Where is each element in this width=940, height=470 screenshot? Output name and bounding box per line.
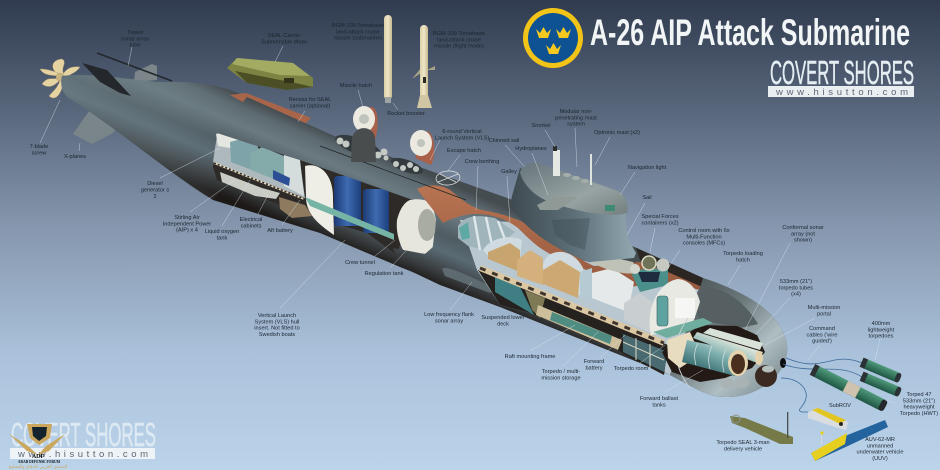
label: vertical launch hull insert: insert. Not fitted to <box>254 326 300 332</box>
label: snorkel <box>532 123 555 147</box>
label: vertical launch hull insert <box>254 240 345 338</box>
torpedo tubes <box>667 328 763 376</box>
dark upper hull near nose <box>636 248 712 290</box>
label: forward ballast tanks: tanks <box>652 402 666 408</box>
frame ring <box>676 318 690 388</box>
towed sonar array tube and fairing <box>97 53 172 82</box>
main cutaway background <box>460 220 703 375</box>
label: modular mast system <box>555 109 597 167</box>
vertical launch system blue tubes <box>334 176 389 233</box>
watermark: Arab Defense Forum shield: ARAB DEFENSE FORUM <box>18 460 61 464</box>
label: torpedo tubes: 533mm (21") <box>780 279 812 285</box>
teal deck <box>305 197 394 240</box>
label: torpedo room <box>614 345 665 372</box>
label: Stirling AIP <box>163 180 235 234</box>
label: rocket booster <box>387 103 425 117</box>
label: Tomahawk submarine: missile (submarine) <box>334 36 382 42</box>
label: electrical cabinets <box>240 195 268 229</box>
label: SEAL carrier <box>261 33 308 62</box>
pressure hull copper band <box>417 185 705 292</box>
label: regulation tank: Regulation tank <box>365 271 404 277</box>
special forces containers <box>590 252 670 274</box>
label: torpedo storage <box>541 332 598 382</box>
label: lightweight torpedoes <box>868 321 895 360</box>
watermark: Covert Shores: www.hisutton.com <box>17 449 148 460</box>
heavyweight torpedo <box>810 364 888 412</box>
label: screw: screw <box>32 150 47 156</box>
aft cutaway: machinery <box>213 132 413 255</box>
label: snorkel: Snorkel <box>532 123 550 129</box>
lower mid hull panel <box>393 220 500 307</box>
icon: electrical cabinets <box>273 170 290 186</box>
label: forward battery: Forward <box>584 359 604 365</box>
label: towed sonar array tube <box>121 30 149 66</box>
label: navigation light: Navigation light <box>628 165 667 171</box>
label: rocket booster: Rocket booster <box>387 111 425 117</box>
nose cap <box>670 278 787 397</box>
icon: crown right <box>556 27 571 38</box>
forward ballast tank and lower nose <box>720 358 786 388</box>
lightweight torpedo 2 <box>860 372 902 397</box>
aft bulkhead <box>305 165 334 235</box>
label: forward battery <box>584 335 625 371</box>
mast ovals <box>563 173 589 183</box>
label: conformal sonar array: shown) <box>794 238 812 244</box>
sail <box>510 146 636 262</box>
icon: diesel generator 2 <box>250 147 284 183</box>
label: Tomahawk flight mode: BGM-109 Tomahawk <box>433 31 485 37</box>
Tomahawk missile submarine mode <box>384 15 392 103</box>
label: forward ballast tanks: Forward ballast <box>640 396 679 402</box>
label: recess for SEAL carrier: Recess for SEAL <box>289 97 331 103</box>
arched bulkhead behind stores <box>483 237 522 260</box>
label: Tomahawk flight mode: missile (flight mode) <box>434 44 484 50</box>
label: command cables: cables ('wire <box>807 332 837 338</box>
torpedo room opening <box>662 325 765 382</box>
label: vertical launch hull insert: Vertical Launch <box>258 313 296 319</box>
SubROV <box>808 408 848 430</box>
label: Tomahawk submarine: land-attack cruise <box>336 29 380 35</box>
label: hydroplanes <box>515 146 548 195</box>
icon: diesel generator 1 <box>230 138 258 172</box>
label: missile hatch <box>340 83 372 107</box>
label: heavyweight torpedo <box>885 392 938 417</box>
label: vertical launch hull insert: Swedish boats <box>259 332 295 338</box>
label: liquid oxygen tank: tank <box>217 235 227 241</box>
label: SubROV: SubROV <box>829 403 851 409</box>
label: sail <box>627 195 652 235</box>
label: multi-mission portal: portal <box>817 311 831 317</box>
label: torpedo loading hatch <box>723 251 763 285</box>
label: heavyweight torpedo: Torped 47 <box>907 392 931 398</box>
label: modular mast system: penetrating mast <box>555 115 597 121</box>
label: heavyweight torpedo: 533mm (21") <box>903 398 935 404</box>
label: SEAL carrier: Submersible dhow <box>261 39 308 45</box>
watermark: Arab Defense Forum shield: المنتدى العربي للدفاع والتسليح <box>9 465 67 470</box>
X-plane upper fin <box>82 63 131 96</box>
label: torpedo loading hatch: hatch <box>736 257 750 263</box>
label: modular mast system: Modular non- <box>560 109 593 115</box>
label: screw: 7-blade <box>30 144 48 150</box>
recess for SEAL carrier <box>230 93 311 124</box>
hull insignia <box>435 170 461 186</box>
label: Stirling AIP: (AIP) x 4 <box>176 228 198 234</box>
label: crew berthing <box>465 159 499 210</box>
label: crew tunnel: Crew tunnel <box>345 260 375 266</box>
X-plane lower fin <box>73 107 118 144</box>
label: chinned sail <box>489 138 525 167</box>
label: crew berthing: Crew berthing <box>465 159 499 165</box>
label: suspended lower deck: Suspended lower <box>481 315 525 321</box>
watermark: Arab Defense Forum shield: ADF <box>32 454 44 460</box>
label: conformal sonar array: Conformal sonar <box>782 225 824 231</box>
aft battery box <box>279 197 312 218</box>
label: Tomahawk flight mode <box>433 31 485 50</box>
arched bulkhead behind box <box>542 252 583 296</box>
label: heavyweight torpedo: heavyweight <box>903 405 935 411</box>
label: raft mounting frame <box>505 325 575 360</box>
label: control room: Control room with 6x <box>678 228 730 234</box>
suspended lower deck frame <box>478 270 668 375</box>
label: torpedo storage: mission storage <box>541 376 581 382</box>
label: diesel generators: 2 <box>153 194 157 200</box>
label: crew tunnel <box>345 240 395 266</box>
command cables <box>781 358 862 412</box>
nose cap upper shell <box>695 286 758 328</box>
gray equipment box <box>624 293 652 333</box>
partition panels <box>580 268 592 300</box>
label: flank sonar: sonar array <box>435 318 463 324</box>
label: X planes <box>64 143 86 160</box>
label: torpedo room: Torpedo room <box>614 366 649 372</box>
teal deck of torpedo room <box>653 318 713 338</box>
crew tunnel bulkhead <box>397 199 436 254</box>
lightweight torpedo 1 <box>860 358 902 383</box>
label: hydroplanes: Hydroplanes <box>515 146 547 152</box>
icon: crown bottom <box>546 43 561 54</box>
label: multi-mission portal <box>765 305 840 345</box>
hull seam line <box>320 146 466 200</box>
label: escape hatch <box>447 148 481 172</box>
label: electrical cabinets: Electrical <box>240 217 262 223</box>
label: screw <box>30 100 60 156</box>
label: conformal sonar array <box>745 225 824 330</box>
crew accommodation drum <box>458 216 515 252</box>
label: AUV: underwater vehicle <box>857 450 903 456</box>
label: control room: Multi-Function <box>686 234 722 240</box>
label: suspended lower deck: deck <box>497 321 509 327</box>
label: recess for SEAL carrier: carrier (optional) <box>290 103 330 109</box>
label: command cables: Command <box>809 326 835 332</box>
forward bulkhead arch with door <box>650 279 700 335</box>
Tomahawk missile flight mode <box>412 25 435 108</box>
label: forward ballast tanks <box>640 370 703 408</box>
label: lightweight torpedoes: torpedoes <box>869 334 894 340</box>
hull strip above aft cutaway <box>217 97 470 200</box>
seven-blade propeller <box>40 59 80 98</box>
label: control room: consoles (MFCs) <box>683 241 725 247</box>
tan stores boxes <box>488 243 580 298</box>
watermark: Arab Defense Forum shield <box>9 424 67 470</box>
label: special forces container: Special Forces <box>642 214 679 220</box>
walkway deck <box>214 163 304 199</box>
label: flank sonar: Low frequency flank <box>424 312 474 318</box>
label: aft battery: Aft battery <box>267 228 293 234</box>
label: galley <box>501 169 517 222</box>
label: suspended lower deck <box>481 315 525 327</box>
label: electrical cabinets: cabinets <box>241 223 262 229</box>
submarine hull <box>61 75 787 397</box>
label: special forces container <box>642 214 679 252</box>
crew tunnel <box>418 209 436 241</box>
label: SEAL delivery vehicle: Torpedo SEAL 3-man <box>716 440 770 446</box>
label: Tomahawk submarine <box>332 23 384 42</box>
watermark: Covert Shores <box>10 416 156 460</box>
label: lightweight torpedoes: lightweight <box>868 327 895 333</box>
sail head <box>520 163 628 215</box>
label: recess for SEAL carrier <box>289 97 331 122</box>
label: torpedo tubes: (x4) <box>791 292 801 298</box>
label: Tomahawk submarine: BGM-109 Tomahawk <box>332 23 384 29</box>
label: modular mast system: system <box>567 122 585 128</box>
label: towed sonar array tube: Towed <box>127 30 143 36</box>
label: torpedo storage: Torpedo / multi- <box>542 369 580 375</box>
missile hatches <box>333 106 434 177</box>
label: navigation light <box>620 165 667 195</box>
label: torpedo tubes <box>755 279 813 335</box>
label: optronic mast: Optronic mast (x2) <box>594 130 640 136</box>
label: towed sonar array tube: tube <box>130 43 140 49</box>
label: aft battery <box>267 200 300 234</box>
control room consoles <box>630 268 668 292</box>
label: vertical launch hull insert: System (VLS) hull <box>255 319 299 325</box>
label: six-round VLS: 6-round Vertical <box>442 129 482 135</box>
Swedish navy roundel <box>523 8 583 68</box>
label: X planes: X-planes <box>64 154 86 160</box>
label: torpedo tubes: torpedo tubes <box>779 285 813 291</box>
hydroplane <box>537 197 578 210</box>
brand logo: Covert Shores: www.hisutton.com <box>775 87 908 98</box>
low frequency flank sonar fairing <box>442 268 495 293</box>
optronic mast <box>590 154 592 185</box>
label: liquid oxygen tank: Liquid oxygen <box>205 229 239 235</box>
label: command cables: guided') <box>812 339 832 345</box>
label: SEAL carrier: SEAL Carrier <box>268 33 301 39</box>
label: optronic mast <box>594 130 640 165</box>
label: conformal sonar array: array (not <box>791 231 815 237</box>
control room white module <box>592 268 634 312</box>
label: galley: Galley <box>501 169 517 175</box>
label: Stirling AIP: Independent Power <box>163 221 211 227</box>
label: Tomahawk flight mode: land-attack cruise <box>437 37 481 43</box>
label: diesel generators: Diesel <box>147 181 163 187</box>
label: control room <box>668 228 730 268</box>
label: liquid oxygen tank <box>205 180 250 241</box>
label: chinned sail: Chinned sail <box>489 138 519 144</box>
label: flank sonar <box>424 282 474 324</box>
label: torpedo loading hatch: Torpedo loading <box>723 251 763 257</box>
label: SEAL delivery vehicle: delivery vehicle <box>724 446 762 452</box>
label: six-round VLS <box>430 129 489 160</box>
label: AUV: (UUV) <box>872 456 888 462</box>
label: multi-mission portal: Multi-mission <box>808 305 840 311</box>
label: command cables <box>807 326 837 360</box>
label: AUV <box>857 437 903 462</box>
snorkel head <box>553 146 557 151</box>
deck rail <box>480 268 664 343</box>
navigation window <box>605 205 615 211</box>
label: SEAL delivery vehicle <box>716 440 770 452</box>
label: diesel generators: generator s <box>141 188 169 194</box>
icon: crown left <box>536 27 551 38</box>
label: AUV: unmanned <box>867 443 893 449</box>
dark console cluster <box>638 272 660 282</box>
label: forward battery: battery <box>585 365 603 371</box>
snorkel <box>553 150 560 176</box>
tail shading <box>61 75 247 200</box>
label: heavyweight torpedo: Torpedo (HWT) <box>900 411 938 417</box>
label: sail: Sail <box>642 195 652 201</box>
label: raft mounting frame: Raft mounting frame <box>505 354 555 360</box>
label: escape hatch: Escape hatch <box>447 148 481 154</box>
Torpedo SEAL delivery vehicle <box>730 412 793 444</box>
label: special forces container: containers (x2) <box>642 220 679 226</box>
icon: AIP Stirling engine <box>220 172 280 199</box>
label: lightweight torpedoes: 400mm <box>872 321 891 327</box>
label: towed sonar array tube: sonar array <box>121 36 149 42</box>
label: missile hatch: Missile hatch <box>340 83 372 89</box>
AUV unmanned underwater vehicle <box>811 420 888 461</box>
label: Stirling AIP: Stirling Air <box>174 215 200 221</box>
SEAL carrier submersible <box>227 58 313 90</box>
label: six-round VLS: Launch System (VLS) <box>435 135 489 141</box>
watermark: Covert Shores: COVERT SHORES <box>11 416 156 453</box>
label: AUV: AUV-62-MR <box>865 437 895 443</box>
label: regulation tank <box>365 240 416 277</box>
label: diesel generators <box>141 148 220 200</box>
